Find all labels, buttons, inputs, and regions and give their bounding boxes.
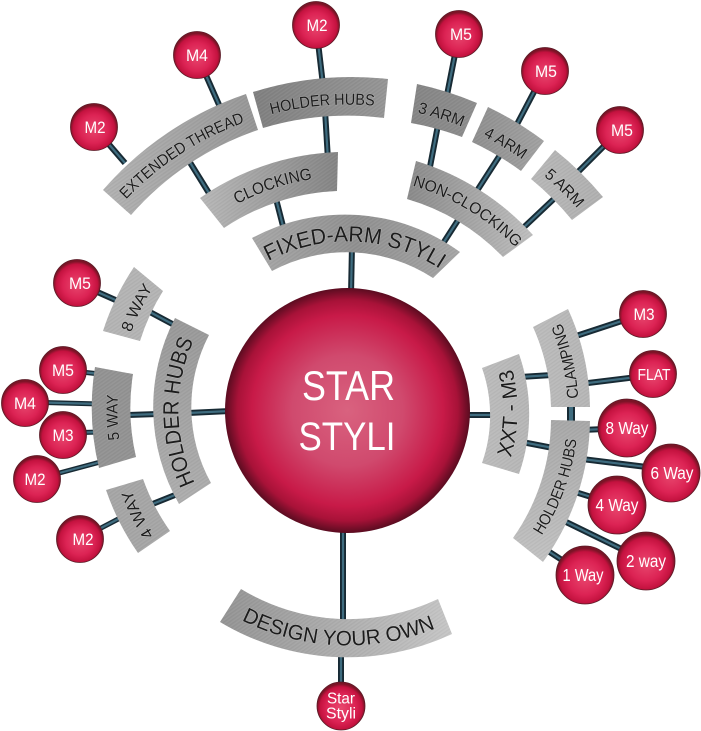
node: flat clamping [630, 350, 676, 398]
rod: XXT to clamping [520, 375, 552, 377]
panel: right holder hubs [513, 420, 590, 562]
panel: 3 arm [411, 84, 477, 137]
rod: M3 to clamping [570, 314, 643, 338]
node: M4 5 way: M4 [14, 394, 36, 413]
rod: M5 to 4 arm [515, 71, 545, 128]
node: M2 4 way [56, 516, 104, 562]
node: M3 5 way: M3 [52, 426, 74, 445]
rod: M2 to 4 way [80, 516, 124, 539]
node: M2 holder hubs: M2 [306, 16, 328, 35]
panel: 4 way: 4 WAY [120, 493, 152, 537]
node: 6 way: 6 Way [650, 463, 694, 483]
rod: flat to clamping [580, 375, 653, 384]
node: 2 way [617, 532, 675, 590]
rod: M5 to 3 arm [447, 34, 459, 95]
central hub: star styli: STAR [302, 362, 395, 409]
node: star styli: Styli [326, 706, 356, 722]
panel: 5 way: 5 WAY [106, 394, 120, 440]
rod: design your own to star styli [338, 650, 344, 700]
panel: top holder hubs [253, 77, 388, 128]
rod: holder hubs to clocking [325, 110, 328, 160]
panel: right holder hubs: HOLDER HUBS [532, 438, 576, 535]
node: M3 clamping [620, 290, 666, 338]
node: flat clamping: FLAT [638, 367, 671, 384]
panel: 4 arm: 4 ARM [484, 128, 528, 160]
panel: left holder hubs: HOLDER HUBS [162, 336, 194, 488]
central hub: star styli [225, 288, 470, 533]
node: 1 way: 1 Way [562, 565, 604, 585]
rod: 8 way to holder hubs [148, 311, 178, 327]
rod: extended thread to clocking [186, 156, 212, 198]
rod: M2 to 5 way [37, 461, 104, 479]
panel: extended thread [103, 94, 258, 215]
rod: M3 to 5 way [63, 432, 100, 433]
rod: clamping to holder hubs [567, 400, 575, 428]
panel: fixed-arm styli: FIXED-ARM STYLI [262, 226, 447, 268]
rod: hub to XXT [465, 412, 492, 418]
node: M5 5 arm [596, 106, 644, 154]
rod: 6 way to holder hubs [582, 459, 671, 470]
panel: clocking [200, 152, 338, 228]
node: M2 5 way [14, 456, 60, 502]
central hub: star styli: STYLI [298, 415, 396, 459]
panel: 3 arm: 3 ARM [418, 102, 466, 127]
node: M2 4 way: M2 [72, 530, 94, 549]
node: 4 way: 4 Way [596, 495, 639, 515]
node: M5 8 way: M5 [69, 274, 91, 293]
node: M2 extended thread [70, 104, 118, 150]
panel: 8 way [103, 267, 163, 341]
rod: XXT to holder hubs [522, 442, 553, 448]
node: M5 5 way: M5 [52, 361, 74, 380]
rod: 1 way to holder hubs [545, 549, 585, 575]
panel: XXT - M3 [482, 354, 530, 474]
node: star styli: Star [327, 690, 356, 708]
panel: non-clocking: NON-CLOCKING [413, 175, 522, 246]
rod: 4 way to holder hubs [572, 491, 617, 505]
node: 2 way: 2 way [626, 551, 666, 571]
rod: 8 way to holder hubs [582, 428, 627, 430]
node: M2 5 way: M2 [24, 470, 46, 489]
node: M4 5 way [2, 380, 48, 426]
rod: 4 way to holder hubs [150, 493, 180, 505]
rod: left M2 to extended thread [94, 127, 125, 163]
panel: clamping [533, 309, 590, 407]
panel: 8 way: 8 WAY [122, 282, 151, 332]
panel: left holder hubs [153, 318, 211, 504]
panel: 5 way [92, 367, 136, 468]
node: 8 way [598, 399, 656, 457]
node: M5 8 way [54, 260, 100, 306]
node: M5 3 arm: M5 [450, 25, 472, 44]
rod: 3 arm to non-clocking [429, 125, 438, 172]
rod: fixed-arm to hub [351, 245, 352, 295]
panel: clocking: CLOCKING [234, 168, 312, 203]
node: M3 5 way [40, 412, 86, 458]
panel: XXT - M3: XXT - M3 [496, 370, 518, 458]
node: M3 clamping: M3 [634, 305, 654, 324]
node: M4 extended thread [174, 32, 220, 78]
rod: M5 to 5 way [63, 370, 100, 374]
panel: extended thread: EXTENDED THREAD [118, 113, 243, 200]
rod: 5 way to holder hubs [128, 414, 158, 415]
panel: 5 arm: 5 ARM [545, 168, 585, 208]
rod: M5 to 5 arm [575, 130, 620, 175]
rod: hub to design your own [340, 525, 346, 625]
rod: holder hubs to hub [188, 411, 230, 413]
panel: 4 arm [472, 107, 544, 171]
panel: design your own: DESIGN YOUR OWN [242, 608, 434, 646]
node: M4 extended thread: M4 [186, 46, 208, 65]
rod: M4 to 5 way [25, 402, 100, 404]
node: M5 4 arm: M5 [535, 62, 557, 81]
panel: 5 arm [531, 150, 603, 220]
node: M5 5 arm: M5 [611, 121, 633, 140]
node: M2 extended thread: M2 [84, 118, 106, 137]
rod: clocking to fixed-arm [275, 195, 284, 230]
panel: clamping: CLAMPING [552, 324, 578, 398]
rod: top M2 to holder hubs [316, 25, 323, 85]
rod: 2 way to holder hubs [562, 520, 646, 561]
node: 8 way: 8 Way [606, 418, 649, 438]
node: 4 way [588, 476, 646, 534]
panel: top holder hubs: HOLDER HUBS [269, 93, 374, 114]
node: M5 4 arm [522, 48, 568, 94]
node: star styli [317, 682, 365, 730]
panel: 4 way [106, 479, 170, 553]
rod: 5 arm to non-clocking [522, 195, 558, 229]
rod: M4 to extended thread [197, 55, 220, 107]
node: M5 3 arm [436, 10, 482, 58]
node: M2 holder hubs [292, 2, 340, 48]
node: 1 way [556, 546, 614, 604]
rod: M5 to 8 way [77, 283, 120, 302]
panel: design your own [220, 589, 452, 658]
node: M5 5 way [40, 346, 86, 394]
node: 6 way [642, 444, 700, 502]
rod: 4 arm to fixed-arm [442, 152, 502, 245]
